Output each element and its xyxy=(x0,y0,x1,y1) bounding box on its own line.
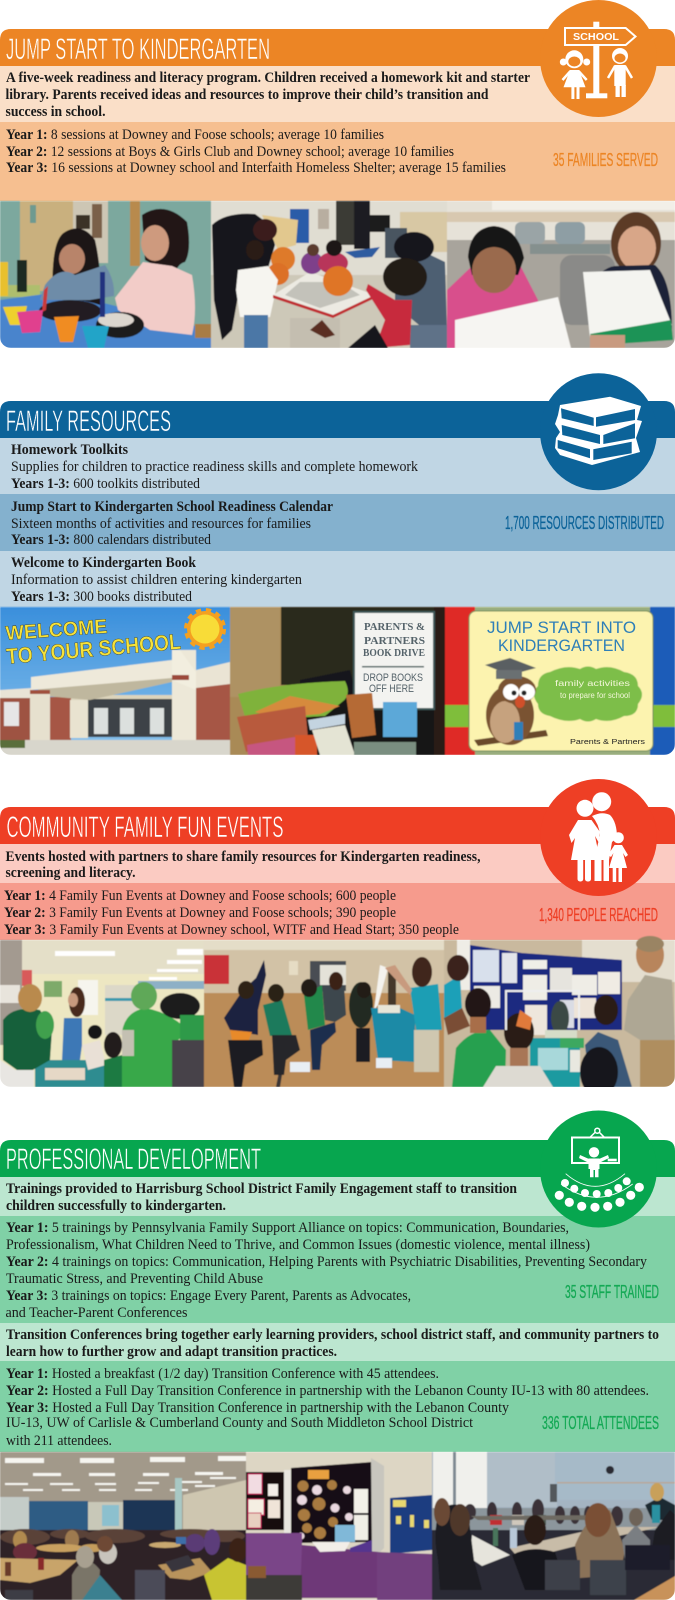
calendar cover text: family activities xyxy=(555,679,630,688)
photo strip xyxy=(0,1452,675,1600)
yearly sessions xyxy=(6,127,506,176)
training years: Professionalism, What Children Need to Thrive, and Common Issues (domestic violence, mental illness) xyxy=(6,1237,590,1253)
photo strip xyxy=(0,201,675,348)
photo strip xyxy=(0,936,675,1097)
title: COMMUNITY FAMILY FUN EVENTS xyxy=(6,811,284,844)
title: FAMILY RESOURCES xyxy=(6,405,171,438)
title: JUMP START TO KINDERGARTEN xyxy=(6,33,270,66)
icon: family xyxy=(540,779,657,896)
icon: school signpost: SCHOOL xyxy=(573,31,620,43)
trainings description: Trainings provided to Harrisburg School District Family Engagement staff to transition xyxy=(6,1181,517,1197)
text: readiness calendar: Sixteen months of activities and resources for families xyxy=(11,516,311,532)
training years xyxy=(6,1220,648,1321)
icon: classroom teacher xyxy=(540,1110,657,1228)
panel: Jump Start to Kindergarten xyxy=(0,0,675,348)
band: calendar xyxy=(0,494,675,551)
calendar cover text: to prepare for school xyxy=(560,691,630,700)
photo text: welcome to your school xyxy=(4,619,181,664)
conference years: with 211 attendees. xyxy=(6,1433,112,1449)
text: readiness calendar xyxy=(11,499,334,548)
heading bar xyxy=(0,29,675,66)
title: PROFESSIONAL DEVELOPMENT xyxy=(6,1143,261,1176)
trainings description xyxy=(6,1181,517,1214)
photo sign text: PARENTS & xyxy=(364,621,425,633)
text: welcome book: Information to assist children entering kindergarten xyxy=(11,572,303,588)
intro band xyxy=(0,66,675,122)
photo sign text: PARTNERS xyxy=(364,635,425,647)
text: welcome book xyxy=(11,555,303,605)
conference years: Year 3: Hosted a Full Day Transition Conference in partnership with the Lebanon County xyxy=(6,1400,510,1416)
text: homework toolkits xyxy=(11,442,419,492)
training years: Year 3: 3 trainings on topics: Engage Every Parent, Parents as Advocates, xyxy=(6,1288,411,1304)
panel: Community Family Fun Events xyxy=(0,779,675,1097)
intro band xyxy=(0,844,675,883)
conference years: Year 2: Hosted a Full Day Transition Conference in partnership with the Lebanon County IU-13 with 80 attendees. xyxy=(6,1383,649,1399)
calendar cover text: KINDERGARTEN xyxy=(498,636,625,655)
heading bar xyxy=(0,401,675,438)
text: readiness calendar: Jump Start to Kindergarten School Readiness Calendar xyxy=(11,499,334,515)
events description: screening and literacy. xyxy=(6,865,136,881)
photo strip xyxy=(0,607,675,755)
conference years: IU-13, UW of Carlisle & Cumberland County and South Middleton School District xyxy=(6,1415,473,1431)
photo text: welcome to your school: TO YOUR SCHOOL xyxy=(5,629,182,669)
years band xyxy=(0,122,675,201)
yearly events: Year 1: 4 Family Fun Events at Downey and Foose schools; 600 people xyxy=(4,888,396,904)
events description: Events hosted with partners to share family resources for Kindergarten readiness, xyxy=(6,849,481,865)
text: welcome book: Years 1-3: 300 books distributed xyxy=(11,589,193,605)
events description xyxy=(6,849,481,881)
band: book xyxy=(0,551,675,607)
panel: Family Resources xyxy=(0,373,675,755)
trainings band xyxy=(0,1216,675,1323)
photo sign text: DROP BOOKS xyxy=(363,672,423,684)
calendar cover text: JUMP START INTO xyxy=(487,618,636,637)
training years: Year 1: 5 trainings by Pennsylvania Family Support Alliance on topics: Communication, Boundaries, xyxy=(6,1220,569,1236)
yearly sessions: Year 3: 16 sessions at Downey school and Interfaith Homeless Shelter; average 15 families xyxy=(6,160,506,176)
conferences years band xyxy=(0,1361,675,1452)
program description xyxy=(6,70,531,120)
program description: success in school. xyxy=(6,104,106,120)
yearly events xyxy=(4,888,459,938)
yearly events: Year 3: 3 Family Fun Events at Downey school, WITF and Head Start; 350 people xyxy=(4,922,459,938)
calendar cover text xyxy=(487,618,646,746)
training years: and Teacher-Parent Conferences xyxy=(6,1305,188,1321)
text: readiness calendar: Years 1-3: 800 calendars distributed xyxy=(11,532,212,548)
icon: sun xyxy=(187,611,223,647)
photo sign text xyxy=(363,621,425,695)
transition conferences band xyxy=(0,1323,675,1361)
years band xyxy=(0,883,675,940)
photo sign text: OFF HERE xyxy=(369,683,414,695)
text: welcome book: Welcome to Kindergarten Book xyxy=(11,555,197,571)
yearly sessions: Year 1: 8 sessions at Downey and Foose schools; average 10 families xyxy=(6,127,384,143)
yearly events: Year 2: 3 Family Fun Events at Downey and Foose schools; 390 people xyxy=(4,905,396,921)
yearly sessions: Year 2: 12 sessions at Boys & Girls Club and Downey school; average 10 families xyxy=(6,144,454,160)
conferences description: learn how to further grow and adapt transition practices. xyxy=(6,1344,337,1360)
conferences description xyxy=(6,1327,659,1360)
photo text: welcome to your school: WELCOME xyxy=(5,616,108,645)
text: homework toolkits: Homework Toolkits xyxy=(11,442,128,458)
icon: school signpost xyxy=(540,0,657,117)
heading bar xyxy=(0,1140,675,1177)
training years: Year 2: 4 trainings on topics: Communication, Helping Parents with Psychiatric Disabilities, Preventing Secondary xyxy=(6,1254,648,1270)
band: toolkits xyxy=(0,438,675,494)
heading bar xyxy=(0,807,675,844)
intro band xyxy=(0,1177,675,1216)
trainings description: children successfully to kindergarten. xyxy=(6,1198,226,1214)
text: homework toolkits: Years 1-3: 600 toolkits distributed xyxy=(11,476,201,492)
icon: stacked books xyxy=(540,373,657,490)
text: homework toolkits: Supplies for children to practice readiness skills and complete homework xyxy=(11,459,419,475)
conference years xyxy=(6,1366,649,1449)
calendar cover text: Parents & Partners xyxy=(570,739,646,746)
program description: library. Parents received ideas and resources to improve their child’s transition and xyxy=(6,87,488,103)
program description: A five-week readiness and literacy program. Children received a homework kit and starter xyxy=(6,70,531,86)
photo sign text: BOOK DRIVE xyxy=(363,647,425,659)
training years: Traumatic Stress, and Preventing Child Abuse xyxy=(6,1271,263,1287)
conference years: Year 1: Hosted a breakfast (1/2 day) Transition Conference with 45 attendees. xyxy=(6,1366,439,1382)
panel: Professional Development xyxy=(0,1110,675,1600)
